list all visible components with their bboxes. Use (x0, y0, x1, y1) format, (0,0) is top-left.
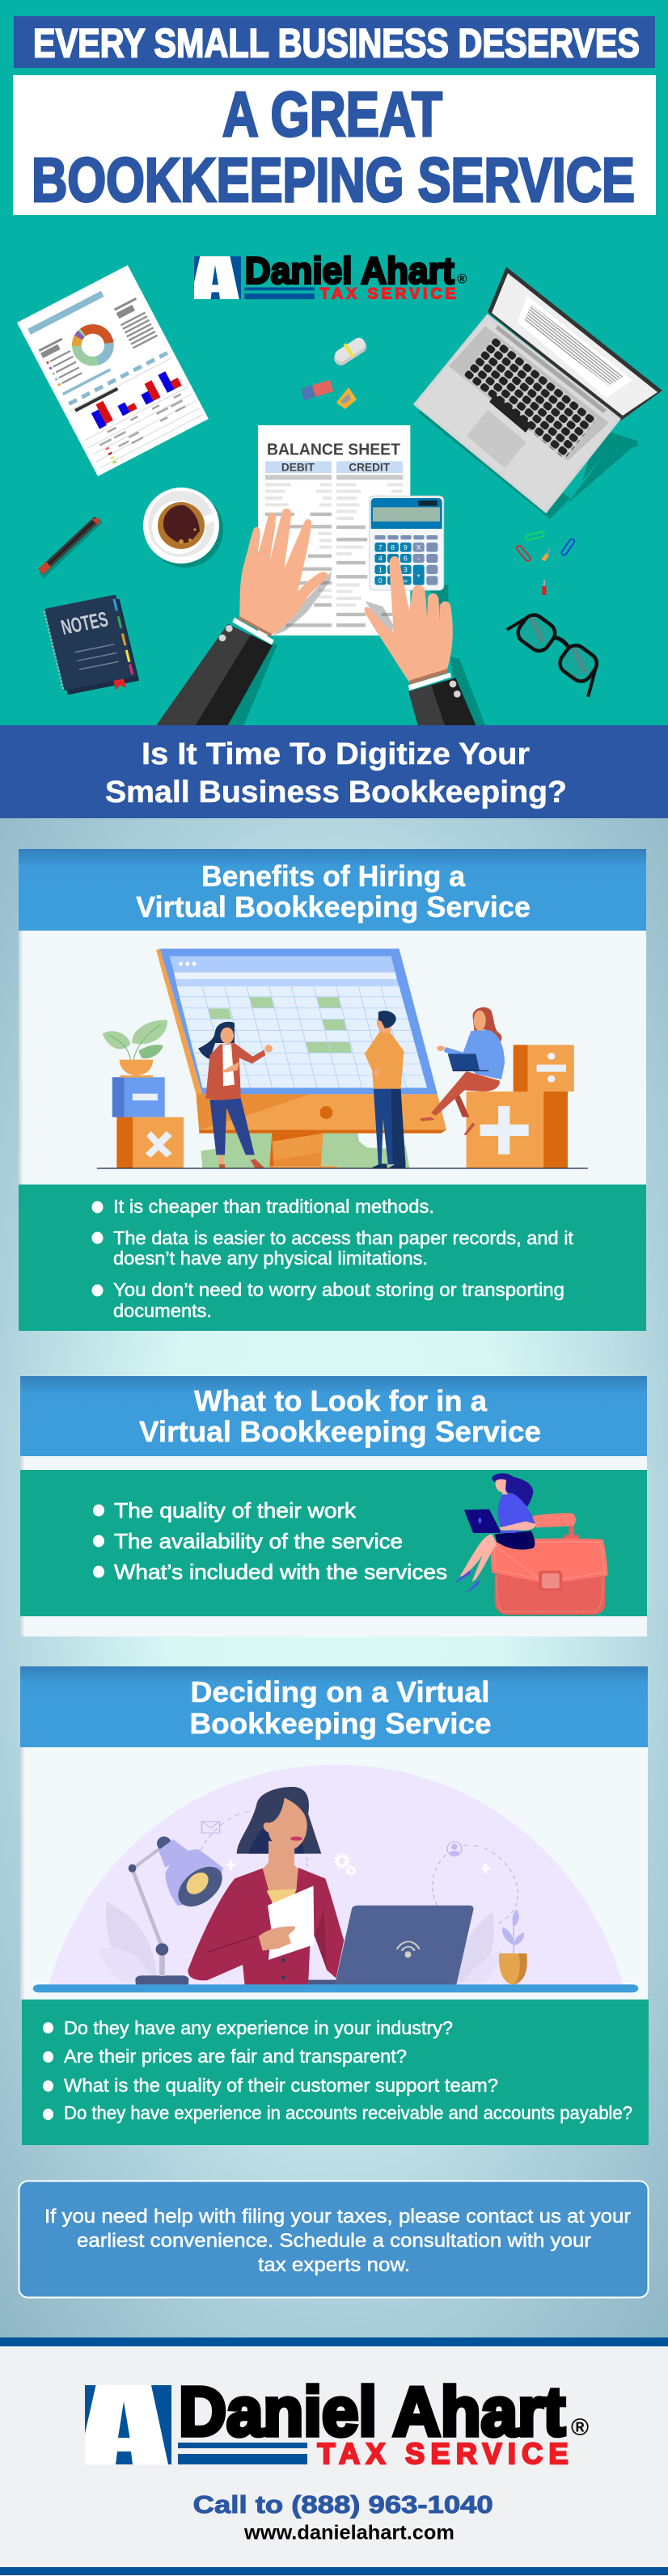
what to look for heading: What to Look for in a (194, 1384, 488, 1417)
decorative dashed icons (201, 1811, 518, 1926)
notebook: notes (44, 594, 141, 700)
callout: contact us: If you need help with filing your taxes, please contact us at your (44, 2206, 631, 2228)
bullet list: benefits (92, 1196, 574, 1321)
balance sheet paper: DEBIT (281, 462, 315, 474)
woman holding paper (188, 1787, 344, 1985)
calculator: 6 (404, 555, 408, 563)
band: is it time to digitize: Is It Time To Digitize Your (142, 737, 530, 771)
illustration: woman on briefcase (455, 1473, 608, 1615)
paper clips and pins (516, 531, 575, 595)
callout: contact us: tax experts now. (258, 2254, 410, 2276)
logo: Daniel Ahart Tax Service (footer): Daniel Ahart (179, 2374, 565, 2451)
footer (0, 2337, 668, 2576)
deciding heading: Bookkeeping Service (189, 1707, 492, 1740)
bullet list: benefits: documents. (113, 1300, 212, 1321)
bullet list: what to look for: The quality of their work (114, 1498, 357, 1522)
bullet list: deciding: What is the quality of their customer support team? (64, 2075, 498, 2096)
callout: contact us (19, 2181, 649, 2298)
panel: what to look for (20, 1376, 647, 1636)
hand shadows (273, 572, 394, 636)
callout: contact us: earliest convenience. Schedule a consultation with your (77, 2230, 591, 2252)
benefits heading: Virtual Bookkeeping Service (136, 890, 531, 923)
logo: Daniel Ahart Tax Service (footer) (85, 2374, 589, 2470)
logo: Daniel Ahart Tax Service (top) (194, 250, 467, 303)
right arm and hand (365, 556, 485, 725)
notebook: notes: NOTES (59, 606, 110, 640)
balance sheet, hands and calculator (156, 425, 485, 725)
pen (40, 518, 100, 576)
bullet list: deciding (43, 2017, 632, 2123)
bullet list: benefits: You don’t need to worry about storing or transporting (113, 1279, 564, 1300)
calculator: - (417, 555, 420, 563)
glasses (503, 606, 610, 697)
calculator: 0 (378, 576, 383, 585)
body background gradient (0, 818, 668, 2337)
bullet list: benefits: The data is easier to access than paper records, and it (113, 1227, 574, 1248)
logo: Daniel Ahart Tax Service (top): Daniel Ahart (245, 250, 454, 292)
panel: deciding on a service (20, 1666, 649, 2145)
laptop and wifi mark (308, 1906, 474, 1985)
calculator: 4 (378, 555, 383, 563)
logo: Daniel Ahart Tax Service (footer): TAX SERVICE (317, 2437, 568, 2470)
calculator: 9 (404, 543, 408, 551)
small desk items: usb, eraser, sharpener (300, 336, 369, 409)
bullet list: deciding: Do they have experience in accounts receivable and accounts payable? (64, 2102, 632, 2123)
logo: Daniel Ahart Tax Service (footer): ® (571, 2414, 589, 2441)
calculator: 1 (378, 566, 383, 574)
balance sheet paper (258, 425, 410, 636)
coffee cup (143, 488, 223, 568)
title panel: a great bookkeeping service (13, 75, 656, 215)
woman with laptop (420, 1007, 505, 1135)
what to look for heading: Virtual Bookkeeping Service (139, 1415, 541, 1448)
left arm and hand (156, 509, 328, 725)
bullet list: benefits: It is cheaper than traditional methods. (113, 1196, 434, 1217)
what to look for heading (20, 1376, 647, 1456)
man standing (365, 1011, 405, 1168)
calculator: 7 (378, 543, 383, 551)
benefits heading (19, 849, 646, 931)
calculator: 3 (404, 566, 408, 574)
bullet list: deciding: Do they have any experience in your industry? (64, 2017, 453, 2038)
deciding heading (20, 1666, 648, 1747)
calculator: + (416, 571, 421, 579)
hero background (0, 0, 668, 725)
donut chart (61, 313, 125, 378)
calculator: = (404, 576, 408, 585)
deciding heading: Deciding on a Virtual (191, 1675, 490, 1708)
logo: Daniel Ahart Tax Service (top): ® (457, 272, 467, 287)
report paper with donut and bar charts (17, 265, 209, 476)
woman presenting (198, 1022, 273, 1168)
calculator: 8 (391, 543, 395, 551)
balance sheet paper: BALANCE SHEET (267, 441, 400, 459)
bullet list: benefits: doesn’t have any physical limitations. (113, 1248, 428, 1269)
logo: Daniel Ahart Tax Service (top): TAX SERVICE (320, 285, 455, 303)
panel: benefits of hiring (19, 849, 646, 1331)
band: is it time to digitize: Small Business Bookkeeping? (105, 775, 567, 809)
bullet list: what to look for (93, 1498, 447, 1584)
balance sheet paper: CREDIT (349, 462, 391, 474)
calculator (370, 496, 448, 604)
benefits heading: Benefits of Hiring a (201, 859, 466, 893)
bullet list: deciding: Are their prices are fair and transparent? (64, 2046, 407, 2067)
calculator: X (416, 543, 421, 551)
illustration: team at spreadsheet monitor (97, 948, 588, 1169)
boxes and plant (103, 1020, 574, 1168)
bullet list: what to look for: What’s included with the services (114, 1560, 447, 1584)
title panel: a great bookkeeping service: A GREAT (222, 78, 442, 150)
desk lamp (129, 1836, 231, 1987)
phone number: Call to (888) 963-1040 (193, 2490, 493, 2519)
bullet list: what to look for: The availability of the service (114, 1529, 403, 1553)
band: is it time to digitize (0, 725, 668, 818)
potted plant (499, 1910, 527, 1985)
website: www.danielahart.com (243, 2521, 454, 2544)
illustration: woman with laptop and lamp (33, 1765, 638, 1992)
laptop (415, 267, 662, 519)
